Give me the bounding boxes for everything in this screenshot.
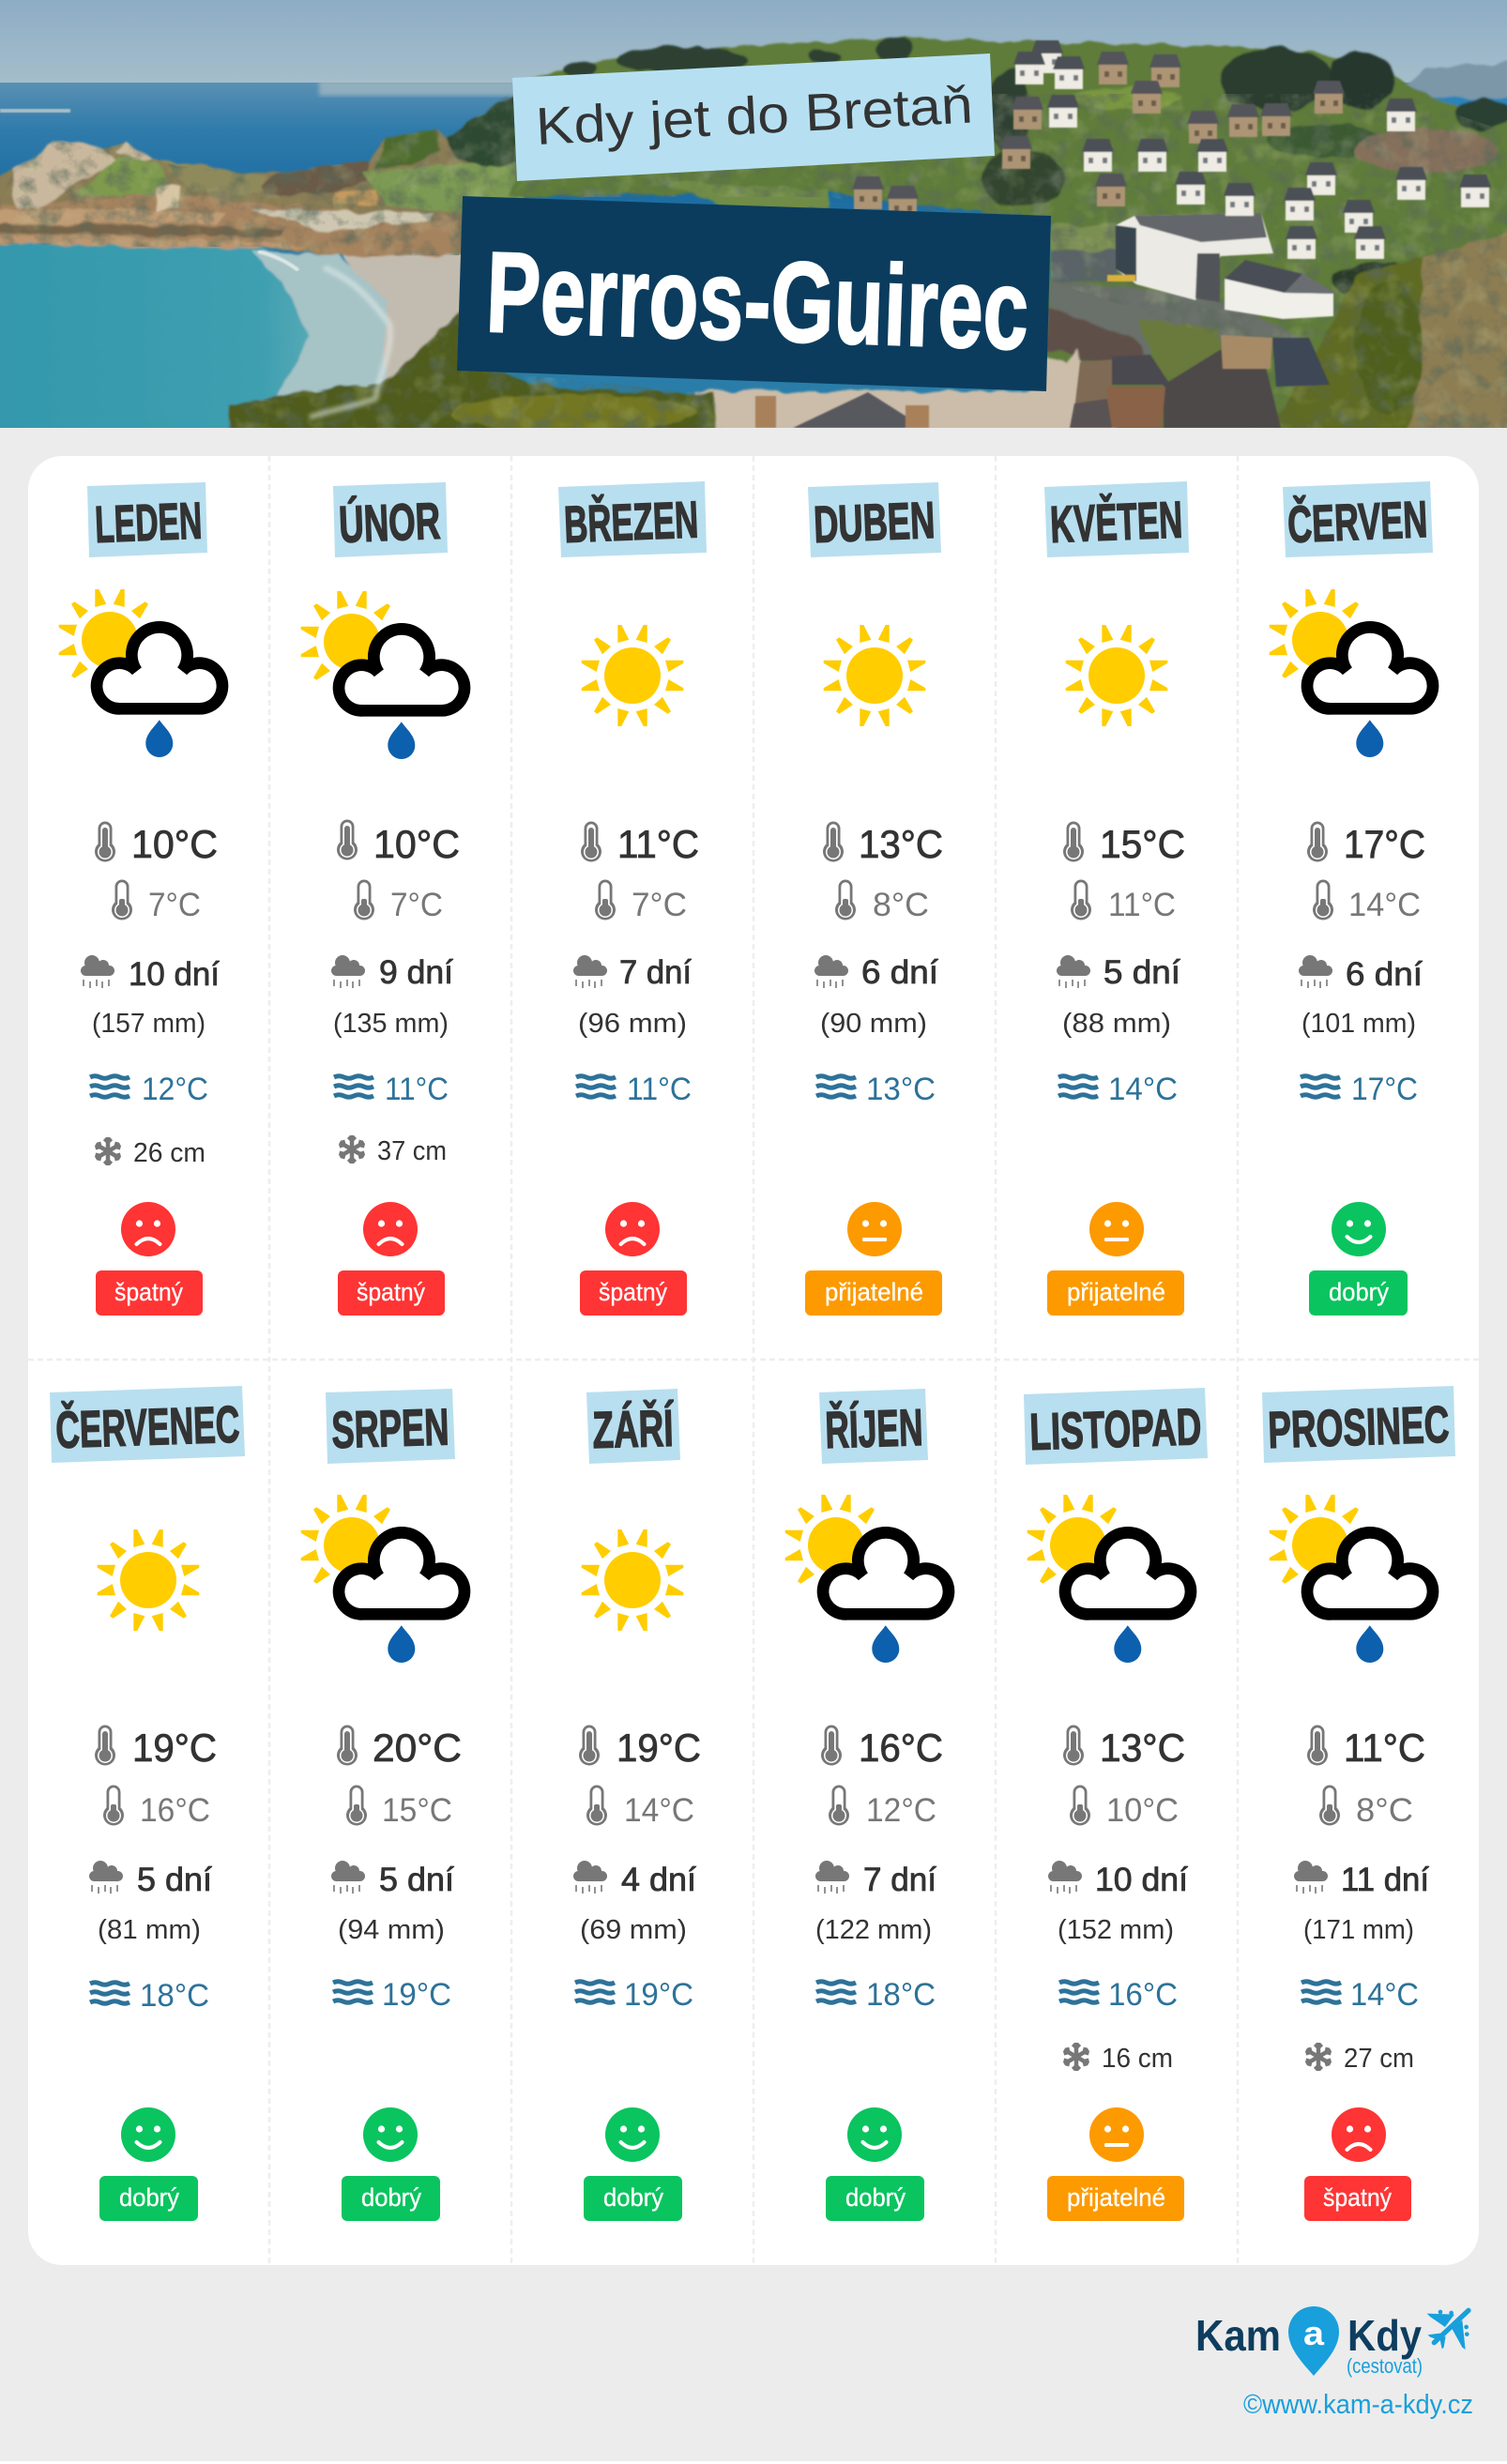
high temperature: [337, 820, 460, 866]
precipitation: (94 mm): [338, 1915, 445, 1945]
panel: ŘÍJEN: [785, 1389, 949, 2221]
month label: ZÁŘÍ: ZÁŘÍ: [592, 1399, 675, 1459]
rating face: good: [121, 2107, 175, 2162]
rainy days: [815, 1861, 936, 1898]
high temperature: [1307, 822, 1425, 866]
low temperature: 16°C: [140, 1792, 210, 1829]
rating badge: přijatelné: [1047, 2176, 1184, 2221]
snow depth: [1304, 2043, 1414, 2074]
sea temperature: [816, 1072, 936, 1107]
precipitation: (88 mm): [1062, 1009, 1171, 1039]
snow depth: 16 cm: [1102, 2044, 1173, 2074]
rating badge: špatný: [338, 1270, 445, 1316]
month label: PROSINEC: [1262, 1386, 1455, 1463]
rainy days: 5 dní: [379, 1862, 454, 1898]
rating badge: špatný: špatný: [1323, 2183, 1392, 2212]
icon: sun: [582, 1529, 683, 1631]
low temperature: [103, 1785, 210, 1829]
low temperature: 8°C: [873, 887, 929, 923]
low temperature: [1071, 880, 1176, 923]
month label: ÚNOR: ÚNOR: [338, 492, 441, 554]
snow depth: [338, 1135, 447, 1166]
panel: ÚNOR: [301, 482, 464, 1316]
month label: LISTOPAD: LISTOPAD: [1028, 1397, 1202, 1461]
rating face: acceptable: [1089, 2107, 1144, 2162]
low temperature: 7°C: [632, 887, 687, 923]
sea temperature: [1059, 1977, 1178, 2013]
rating badge: dobrý: [1309, 1270, 1408, 1316]
icon: airplane: [1427, 2310, 1469, 2350]
rating badge: přijatelné: přijatelné: [1067, 1278, 1165, 1306]
month label: SRPEN: [326, 1389, 455, 1464]
sea temperature: 18°C: [140, 1978, 209, 2014]
icon: partly cloudy with rain: [301, 1495, 464, 1663]
month label: DUBEN: DUBEN: [813, 491, 936, 554]
logo: Kam a Kdy: [1195, 2306, 1469, 2378]
sea temperature: 12°C: [142, 1072, 208, 1107]
month label: DUBEN: [808, 482, 941, 557]
rating badge: dobrý: dobrý: [603, 2183, 663, 2212]
low temperature: 14°C: [1348, 887, 1421, 923]
low temperature: [346, 1785, 452, 1829]
rainy days: 10 dní: [129, 956, 220, 993]
high temperature: [821, 1725, 943, 1770]
month label: ZÁŘÍ: [586, 1389, 680, 1464]
rainy days: [1057, 954, 1180, 991]
icon: sun: [98, 1529, 199, 1631]
precipitation: (69 mm): [580, 1915, 687, 1945]
logo: Kam a Kdy: (cestovat): [1347, 2354, 1423, 2378]
icon: map pin: [1288, 2306, 1339, 2376]
precipitation: (157 mm): [92, 1009, 206, 1039]
rating badge: špatný: špatný: [114, 1278, 183, 1306]
rainy days: [1299, 955, 1423, 993]
rating badge: dobrý: dobrý: [361, 2183, 421, 2212]
low temperature: [829, 1785, 936, 1829]
rainy days: [573, 1861, 696, 1898]
rating face: bad: [363, 1202, 418, 1256]
sea temperature: [816, 1977, 936, 2013]
high temperature: [581, 822, 699, 866]
rating badge: špatný: [580, 1270, 687, 1316]
sea temperature: 11°C: [385, 1072, 449, 1107]
snow depth: 37 cm: [377, 1136, 447, 1166]
low temperature: [586, 1785, 694, 1829]
month label: LEDEN: LEDEN: [94, 491, 203, 554]
month label: BŘEZEN: BŘEZEN: [563, 490, 699, 554]
rating badge: špatný: [1304, 2176, 1411, 2221]
rainy days: 11 dní: [1341, 1862, 1429, 1898]
high temperature: 13°C: [1100, 1726, 1185, 1770]
sea temperature: 11°C: [627, 1072, 692, 1107]
rating face: bad: [121, 1202, 175, 1256]
title: subtitle label: Kdy jet do Bretaň: [534, 74, 974, 156]
high temperature: [1063, 1725, 1185, 1770]
logo: Kam a Kdy: Kdy: [1347, 2311, 1422, 2360]
panel: SRPEN: [301, 1389, 464, 2221]
rainy days: 6 dní: [861, 954, 938, 991]
low temperature: 7°C: [148, 887, 201, 923]
precipitation: (81 mm): [98, 1915, 201, 1945]
sea temperature: [333, 1977, 451, 2013]
rating face: good: [1332, 1202, 1386, 1256]
low temperature: [1313, 880, 1421, 923]
sea temperature: [1301, 1072, 1418, 1107]
panel: LISTOPAD: [1024, 1388, 1208, 2221]
panel: monthly climate table: [28, 456, 1479, 2265]
low temperature: 8°C: [1356, 1792, 1413, 1829]
rating badge: přijatelné: [805, 1270, 942, 1316]
high temperature: 17°C: [1344, 822, 1425, 866]
high temperature: 19°C: [616, 1726, 701, 1770]
rating badge: dobrý: dobrý: [1329, 1278, 1389, 1306]
rating badge: dobrý: [342, 2176, 440, 2221]
month label: LEDEN: [87, 482, 207, 557]
rainy days: [814, 954, 938, 991]
month label: ČERVENEC: [50, 1386, 245, 1463]
icon: partly cloudy with rain: [1270, 1495, 1433, 1663]
high temperature: [579, 1725, 701, 1770]
high temperature: [823, 822, 943, 866]
month label: SRPEN: SRPEN: [331, 1397, 449, 1459]
rating face: acceptable: [1089, 1202, 1144, 1256]
sea temperature: 13°C: [866, 1072, 936, 1107]
sea temperature: 19°C: [624, 1977, 693, 2013]
low temperature: [1070, 1785, 1179, 1829]
title: destination name: [457, 196, 1051, 391]
rainy days: [1048, 1861, 1188, 1898]
rainy days: 10 dní: [1095, 1862, 1188, 1898]
rating face: bad: [1332, 2107, 1386, 2162]
low temperature: 7°C: [390, 887, 443, 923]
low temperature: [112, 880, 201, 923]
rating badge: přijatelné: přijatelné: [1067, 2183, 1165, 2212]
high temperature: [337, 1725, 462, 1770]
rainy days: [1294, 1861, 1429, 1898]
high temperature: 11°C: [1344, 1726, 1425, 1770]
title: destination name: Perros-Guirec: [484, 228, 1030, 373]
rainy days: [89, 1861, 212, 1898]
month label: KVĚTEN: [1044, 481, 1189, 557]
month label: ÚNOR: [333, 482, 448, 557]
sea temperature: 16°C: [1108, 1977, 1178, 2013]
sea temperature: [575, 1977, 693, 2013]
snow depth: [1062, 2043, 1173, 2074]
sea temperature: 17°C: [1351, 1072, 1418, 1107]
high temperature: [1063, 822, 1185, 866]
month label: LISTOPAD: [1024, 1388, 1208, 1465]
month label: BŘEZEN: [558, 481, 707, 557]
sea temperature: [90, 1072, 208, 1107]
icon: partly cloudy with rain: [1028, 1495, 1191, 1663]
rainy days: 6 dní: [1346, 956, 1423, 993]
icon: partly cloudy with rain: [785, 1495, 949, 1663]
high temperature: 10°C: [131, 822, 218, 866]
icon: sun: [582, 625, 683, 726]
sea temperature: 18°C: [866, 1977, 936, 2013]
icon: sun: [1066, 625, 1167, 726]
rating badge: dobrý: [584, 2176, 682, 2221]
sea temperature: [1302, 1977, 1419, 2013]
rating badge: špatný: špatný: [357, 1278, 425, 1306]
rating badge: špatný: [96, 1270, 203, 1316]
month label: ČERVEN: [1283, 481, 1433, 557]
sea temperature: [334, 1072, 449, 1107]
panel: ČERVEN: [1270, 481, 1433, 1316]
high temperature: [1307, 1725, 1425, 1770]
icon: partly cloudy with rain: [59, 589, 222, 757]
snow depth: [94, 1137, 206, 1168]
low temperature: 15°C: [382, 1792, 452, 1829]
precipitation: (171 mm): [1303, 1915, 1414, 1945]
precipitation: (135 mm): [333, 1009, 449, 1039]
website credit: ©www.kam-a-kdy.cz: [1243, 2390, 1473, 2420]
panel: DUBEN: [805, 482, 943, 1316]
rating badge: přijatelné: přijatelné: [825, 1278, 923, 1306]
logo: Kam a Kdy: Kam: [1195, 2311, 1281, 2360]
month label: ČERVEN: ČERVEN: [1286, 490, 1428, 554]
rainy days: 5 dní: [1104, 954, 1180, 991]
panel: KVĚTEN: [1044, 481, 1189, 1316]
precipitation: (152 mm): [1058, 1915, 1174, 1945]
rainy days: 5 dní: [137, 1862, 212, 1898]
rainy days: 4 dní: [621, 1862, 696, 1898]
rainy days: [81, 955, 220, 993]
month label: ŘÍJEN: [819, 1389, 928, 1464]
high temperature: 13°C: [859, 822, 943, 866]
sea temperature: [1058, 1072, 1178, 1107]
rating badge: přijatelné: [1047, 1270, 1184, 1316]
icon: sun: [824, 625, 925, 726]
high temperature: 16°C: [859, 1726, 943, 1770]
low temperature: 11°C: [1108, 887, 1176, 923]
rating face: good: [605, 2107, 660, 2162]
precipitation: (101 mm): [1302, 1009, 1416, 1039]
sea temperature: 19°C: [382, 1977, 451, 2013]
rating badge: dobrý: [99, 2176, 198, 2221]
high temperature: 19°C: [132, 1726, 217, 1770]
low temperature: 12°C: [866, 1792, 936, 1829]
sea temperature: [576, 1072, 692, 1107]
sea temperature: 14°C: [1108, 1072, 1178, 1107]
precipitation: (122 mm): [815, 1915, 932, 1945]
month label: ČERVENEC: ČERVENEC: [54, 1395, 240, 1459]
panel: BŘEZEN: [558, 481, 707, 1316]
rainy days: 7 dní: [619, 954, 692, 991]
sea temperature: 14°C: [1350, 1977, 1419, 2013]
low temperature: 14°C: [624, 1792, 694, 1829]
low temperature: 10°C: [1106, 1792, 1179, 1829]
rating face: bad: [605, 1202, 660, 1256]
high temperature: 11°C: [617, 822, 699, 866]
rating badge: špatný: špatný: [599, 1278, 667, 1306]
low temperature: [595, 880, 687, 923]
panel: ZÁŘÍ: [573, 1389, 701, 2221]
precipitation: (96 mm): [578, 1009, 687, 1039]
month label: ŘÍJEN: ŘÍJEN: [825, 1398, 923, 1459]
panel: LEDEN: [59, 482, 222, 1316]
precipitation: (90 mm): [820, 1009, 927, 1039]
month label: KVĚTEN: KVĚTEN: [1049, 490, 1183, 554]
icon: partly cloudy with rain: [301, 591, 464, 759]
high temperature: 20°C: [373, 1726, 462, 1770]
high temperature: [95, 1725, 217, 1770]
rainy days: 9 dní: [379, 954, 453, 991]
icon: partly cloudy with rain: [1270, 589, 1433, 757]
rainy days: [573, 954, 692, 991]
snow depth: 26 cm: [133, 1138, 206, 1168]
rating badge: dobrý: dobrý: [845, 2183, 906, 2212]
title: subtitle label: [512, 53, 995, 181]
rainy days: [331, 1861, 454, 1898]
high temperature: [95, 822, 218, 866]
high temperature: 15°C: [1100, 822, 1185, 866]
header photo: Perros-Guirec coast: [0, 0, 1507, 450]
panel: PROSINEC: [1262, 1386, 1455, 2221]
sea temperature: [90, 1978, 209, 2014]
snow depth: 27 cm: [1344, 2044, 1414, 2074]
rating badge: dobrý: dobrý: [119, 2183, 179, 2212]
rainy days: 7 dní: [863, 1862, 936, 1898]
icon: map pin: a: [1303, 2314, 1325, 2352]
high temperature: 10°C: [373, 822, 460, 866]
low temperature: [1319, 1785, 1413, 1829]
rating face: good: [363, 2107, 418, 2162]
rating face: good: [847, 2107, 902, 2162]
low temperature: [354, 880, 443, 923]
rating badge: dobrý: [826, 2176, 924, 2221]
rainy days: [331, 954, 453, 991]
rating face: acceptable: [847, 1202, 902, 1256]
panel: ČERVENEC: [50, 1386, 245, 2221]
low temperature: [835, 880, 929, 923]
